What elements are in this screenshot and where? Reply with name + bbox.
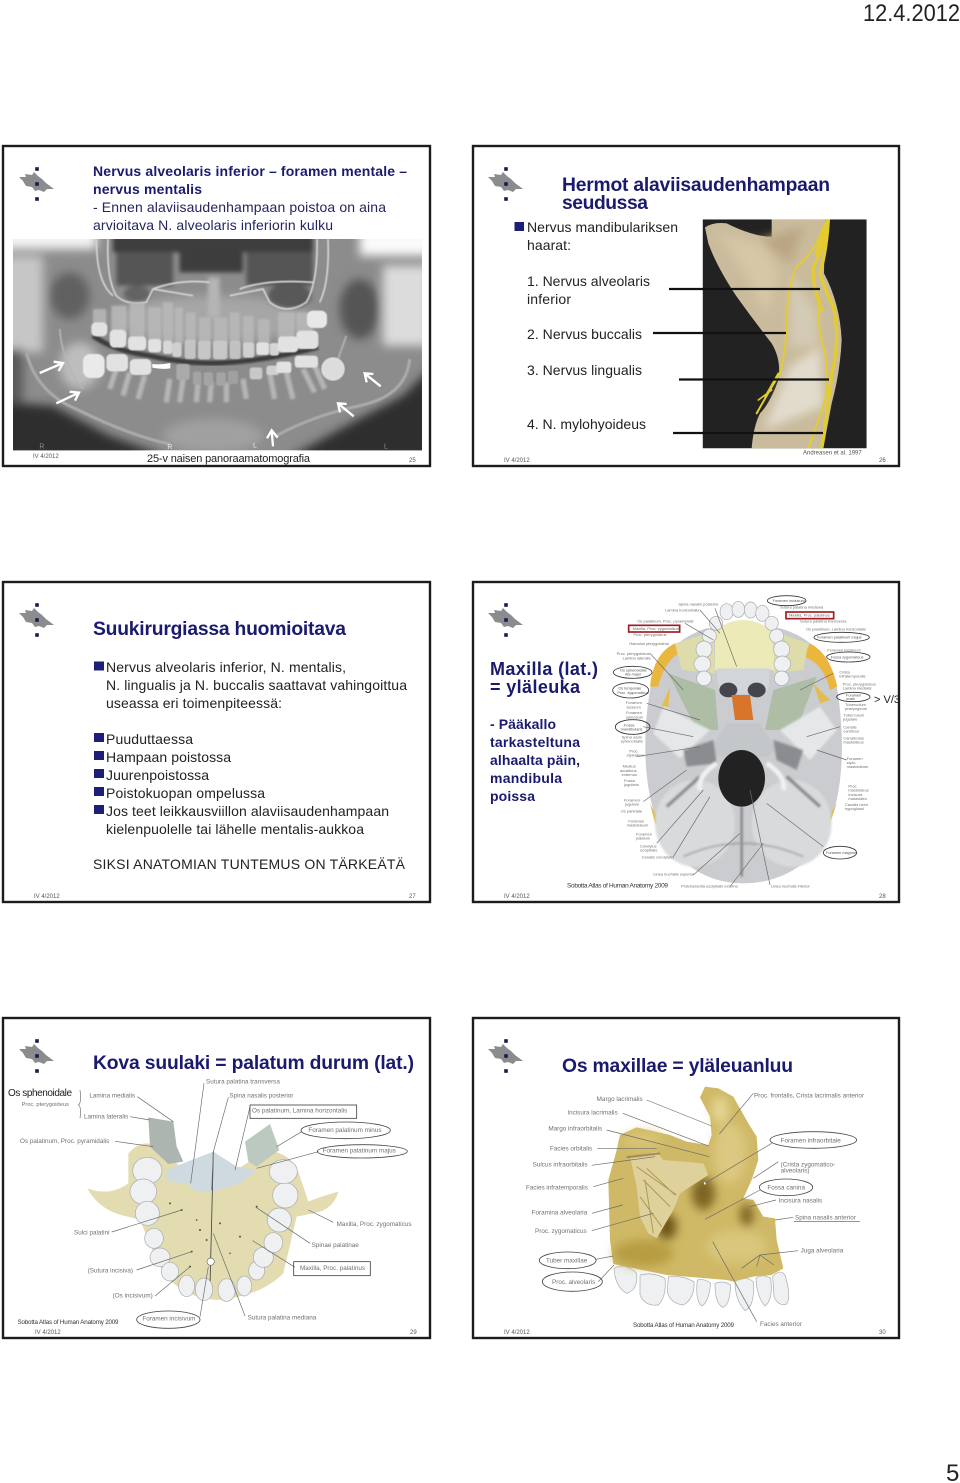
skull base illustration: Canalis nervi bbox=[845, 802, 868, 807]
skull base illustration: Foramen palatinum majus bbox=[817, 636, 862, 640]
panel: slide 30 maxilla: Sobotta Atlas of Human Anatomy 2009 bbox=[633, 1322, 735, 1329]
panel: slide 28 skull bbox=[473, 582, 900, 902]
skull base illustration: Os parietale bbox=[621, 809, 643, 814]
body text: N. lingualis ja N. buccalis saattavat vahingoittua bbox=[106, 677, 407, 693]
panel: slide 29 hard palate: IV 4/2012 bbox=[35, 1330, 61, 1336]
panel: slide 30 maxilla: IV 4/2012 bbox=[504, 1330, 530, 1336]
skull base illustration: Foramen bbox=[847, 756, 863, 761]
skull base illustration: palatum bbox=[636, 835, 651, 840]
panel: slide 30 maxilla bbox=[473, 1018, 899, 1338]
panel: slide 28 skull: Sobotta Atlas of Human Anatomy 2009 bbox=[567, 882, 668, 890]
body text: Jos teet leikkausviillon alaviisaudenhampaan bbox=[106, 803, 389, 819]
skull base illustration: mastoideum bbox=[627, 823, 649, 828]
maxilla illustration: Facies anterior bbox=[760, 1321, 802, 1328]
palate illustration: Lamina medialis bbox=[89, 1093, 135, 1100]
maxilla illustration: Proc. zygomaticus bbox=[535, 1228, 587, 1235]
panoramic x-ray image bbox=[13, 239, 422, 450]
pointer lines bbox=[653, 289, 829, 433]
body text: useassa eri toimenpiteessä: bbox=[106, 695, 282, 711]
skull base illustration: spinosum bbox=[626, 714, 644, 719]
palate illustration: (Sutura incisiva) bbox=[88, 1267, 133, 1274]
skull base illustration: sphenoidalis bbox=[621, 739, 643, 744]
panel: slide 27 surgery: IV 4/2012 bbox=[34, 894, 60, 900]
skull base illustration: lacerum bbox=[627, 704, 642, 709]
skull base illustration: Foramen bbox=[626, 700, 642, 705]
maxilla illustration: Spina nasalis anterior bbox=[795, 1214, 856, 1221]
nerve list: inferior bbox=[527, 291, 571, 307]
skull base illustration: externus bbox=[622, 772, 637, 777]
maxilla illustration: Facies orbitalis bbox=[550, 1145, 592, 1152]
slide 28 title bbox=[490, 659, 598, 697]
panel: slide 27 surgery bbox=[3, 582, 430, 902]
skull base illustration: ovale bbox=[846, 697, 855, 701]
palate illustration bbox=[20, 1079, 412, 1328]
skull base illustration: Spina nasalis posterior bbox=[678, 602, 719, 607]
slide 28 description: - Pääkallo bbox=[490, 716, 556, 732]
maxilla illustration: Foramen infraorbitale bbox=[781, 1137, 841, 1144]
maxilla illustration: Proc. frontalis, Crista lacrimalis anterior bbox=[754, 1093, 864, 1100]
skull base illustration: mastoideum bbox=[847, 764, 869, 769]
icon: university logo bbox=[19, 603, 54, 637]
body text: Poistokuopan ompelussa bbox=[106, 785, 265, 801]
skull base illustration: Foramen bbox=[846, 693, 861, 697]
skull base illustration: jugulare bbox=[842, 717, 858, 722]
body text: kielenpuolelle tai lähelle mentalis-aukkoa bbox=[106, 821, 364, 837]
skull base illustration: Canalis condylaris bbox=[642, 855, 674, 860]
palate illustration: Foramen incisivum bbox=[142, 1316, 195, 1323]
skull base illustration: Foramen incisivum bbox=[827, 647, 861, 652]
skull base illustration: mastoidea bbox=[848, 796, 867, 801]
icon: university logo bbox=[488, 603, 523, 637]
skull base illustration: Maxilla, Proc. zygomaticus bbox=[633, 626, 680, 631]
skull base illustration: Spina ossis bbox=[622, 734, 642, 739]
skull base illustration: Incisura bbox=[848, 792, 863, 797]
panel: slide 26 nerves bbox=[473, 146, 899, 466]
skull base illustration: Sutura palatina transversa bbox=[800, 619, 847, 624]
slide 25 heading text: - Ennen alaviisaudenhampaan poistoa on aina bbox=[93, 199, 386, 215]
skull base illustration: Proc. bbox=[629, 749, 639, 754]
panel: slide 29 hard palate bbox=[3, 1018, 430, 1338]
icon: university logo bbox=[488, 167, 523, 201]
panoramic x-ray image: L bbox=[384, 443, 388, 450]
skull base illustration: styloideus bbox=[627, 753, 644, 758]
skull base illustration: Lamina lateralis bbox=[623, 655, 651, 660]
skull base illustration: Foramen magnum bbox=[826, 851, 857, 855]
skull base illustration: Os palatinum, Lamina horizontalis bbox=[806, 627, 866, 632]
slide 26 title: Hermot alaviisaudenhampaan bbox=[562, 175, 830, 196]
skull base illustration: Foramen bbox=[626, 710, 642, 715]
skull base illustration: Meatus bbox=[623, 764, 636, 769]
maxilla illustration: alveolaris) bbox=[781, 1168, 810, 1175]
skull base illustration: Crista bbox=[839, 669, 851, 674]
slide 25 heading text: arvioitava N. alveolaris inferiorin kulku bbox=[93, 217, 333, 233]
arrows bbox=[40, 362, 381, 446]
skull base illustration: Linea nuchalis inferior bbox=[771, 883, 810, 888]
skull base illustration: Linea nuchalis superior bbox=[653, 872, 695, 877]
palate illustration: (Os incisivum) bbox=[113, 1293, 153, 1300]
skull base illustration: Fossa zygomaticus bbox=[831, 655, 864, 659]
label: Os sphenoidale: Os sphenoidale bbox=[8, 1088, 72, 1099]
skull base illustration: Canaliculus bbox=[843, 735, 864, 740]
panel: slide 25 panoramic x-ray: IV 4/2012 bbox=[33, 454, 59, 460]
panoramic x-ray image: L bbox=[253, 443, 257, 450]
icon: university logo bbox=[19, 167, 54, 201]
slide 28 title: Maxilla (lat.) bbox=[490, 659, 598, 679]
maxilla illustration: Facies infratemporalis bbox=[526, 1184, 588, 1191]
panoramic x-ray image: R bbox=[39, 443, 44, 450]
maxilla illustration: (Crista zygomatico- bbox=[781, 1161, 835, 1168]
skull base illustration: Ala major bbox=[625, 673, 642, 677]
skull base illustration: Tuberculum bbox=[843, 713, 865, 718]
body text: Puuduttaessa bbox=[106, 731, 193, 747]
skull base illustration: Os temporale bbox=[618, 686, 641, 690]
panel: slide 25 panoramic x-ray: 25 bbox=[409, 458, 416, 464]
skull base illustration: Foramen incisivum bbox=[773, 599, 805, 603]
skull base illustration: infratemporalis bbox=[839, 673, 865, 678]
palate illustration: Spinae palatinae bbox=[312, 1242, 359, 1249]
skull base illustration: Os sphenoidale bbox=[620, 669, 647, 673]
palate illustration: Foramen palatinum majus bbox=[323, 1148, 396, 1155]
maxilla illustration: Incisura nasalis bbox=[779, 1197, 822, 1204]
skull base illustration: Proc. pterygoideus bbox=[617, 651, 650, 656]
slide 29 title: Kova suulaki = palatum durum (lat.) bbox=[93, 1053, 414, 1074]
skull base illustration: Foramen bbox=[628, 819, 644, 824]
maxilla illustration: Margo infraorbitalis bbox=[548, 1126, 602, 1133]
palate illustration: Foramen palatinum minus bbox=[308, 1127, 382, 1134]
palate illustration: Os palatinum, Proc. pyramidalis bbox=[20, 1138, 109, 1145]
skull base illustration: caroticus bbox=[843, 729, 859, 734]
skull base illustration: mandibularis bbox=[621, 727, 642, 731]
nerve list: haarat: bbox=[527, 237, 571, 253]
slide 28 description bbox=[490, 716, 580, 804]
skull base illustration: Proc. bbox=[848, 783, 858, 788]
skull base illustration: Os palatinum, Proc. pyramidalis bbox=[637, 618, 694, 623]
palate illustration: Sulci palatini bbox=[74, 1229, 110, 1236]
skull base illustration: occipitalis bbox=[640, 847, 657, 852]
icon: university logo bbox=[19, 1039, 54, 1073]
palate illustration: Sutura palatina mediana bbox=[248, 1314, 317, 1321]
skull base illustration: mastoideus bbox=[843, 739, 864, 744]
panel: slide 25 panoramic x-ray bbox=[3, 146, 433, 466]
skull base illustration: Maxilla, Proc. palatinus bbox=[789, 613, 830, 618]
skull base illustration: stylo- bbox=[847, 760, 857, 765]
palate illustration: Sutura palatina transversa bbox=[206, 1079, 280, 1086]
body text: Nervus alveolaris inferior, N. mentalis, bbox=[106, 659, 346, 675]
skull base illustration: Foramen bbox=[624, 798, 640, 803]
slide 28 description: mandibula bbox=[490, 770, 562, 786]
skull base illustration: Lamina medialis bbox=[843, 685, 871, 690]
body text: Juurenpoistossa bbox=[106, 767, 209, 783]
body text: Hampaan poistossa bbox=[106, 749, 231, 765]
skull base illustration: Proc. pterygoideus bbox=[843, 681, 876, 686]
slide 28 description: poissa bbox=[490, 788, 535, 804]
panoramic x-ray image: R bbox=[167, 444, 172, 451]
skull base illustration: Fossa bbox=[624, 723, 635, 727]
maxilla illustration: Tuber maxillae bbox=[546, 1258, 588, 1265]
nerve list: 2. Nervus buccalis bbox=[527, 326, 642, 342]
skull base illustration: Lamina horizontalis bbox=[665, 608, 699, 613]
maxilla illustration bbox=[526, 1087, 864, 1328]
panel: slide 26 nerves: 26 bbox=[879, 458, 886, 464]
skull base illustration: Protuberantia occipitalis externa bbox=[681, 883, 738, 888]
maxilla illustration: Foramina alveolaria bbox=[532, 1209, 588, 1216]
skull base illustration bbox=[613, 596, 876, 888]
palate illustration: Maxilla, Proc. palatinus bbox=[300, 1265, 365, 1272]
palate illustration: Spina nasalis posterior bbox=[229, 1093, 293, 1100]
body text bbox=[93, 659, 407, 872]
slide 28 description: tarkasteltuna bbox=[490, 734, 580, 750]
panel: slide 28 skull: IV 4/2012 bbox=[504, 894, 530, 900]
panel: slide 26 nerves: IV 4/2012 bbox=[504, 458, 530, 464]
skull base illustration: Canalis bbox=[843, 725, 857, 730]
skull base illustration: pharyngeum bbox=[845, 706, 868, 711]
skull base illustration: Tuberculum bbox=[845, 702, 867, 707]
nerve anatomy image bbox=[703, 219, 867, 448]
body text: SIKSI ANATOMIAN TUNTEMUS ON TÄRKEÄTÄ bbox=[93, 856, 406, 872]
slide 25 heading text: nervus mentalis bbox=[93, 181, 202, 197]
maxilla illustration: Proc. alveolaris bbox=[552, 1279, 595, 1286]
panel: slide 29 hard palate: 29 bbox=[410, 1330, 417, 1336]
skull base illustration: hypoglossi bbox=[845, 806, 864, 811]
skull base illustration: acusticus bbox=[620, 768, 637, 773]
skull base illustration: Proc. zygomaticus bbox=[617, 691, 649, 695]
slide 30 title: Os maxillae = yläleuanluu bbox=[562, 1056, 793, 1077]
panel: slide 29 hard palate: Sobotta Atlas of Human Anatomy 2009 bbox=[18, 1319, 119, 1326]
skull base illustration: mastoideus bbox=[848, 787, 869, 792]
slide 25 heading text bbox=[93, 163, 407, 233]
nerve list bbox=[514, 219, 678, 432]
panel: slide 27 surgery: 27 bbox=[409, 894, 416, 900]
palate illustration: Proc. pterygoideus bbox=[22, 1102, 69, 1108]
panel: slide 30 maxilla: 30 bbox=[879, 1330, 886, 1336]
palate illustration: Lamina lateralis bbox=[84, 1113, 128, 1120]
skull base illustration: Fossa bbox=[624, 778, 636, 783]
maxilla illustration: Sulcus infraorbitalis bbox=[533, 1162, 588, 1169]
skull base illustration: Proc. pterygoideus bbox=[633, 632, 667, 637]
slide 26 title bbox=[562, 175, 830, 214]
slide 26 title: seudussa bbox=[562, 193, 648, 214]
maxilla illustration: Incisura lacrimalis bbox=[567, 1109, 618, 1116]
slide 27 title: Suukirurgiassa huomioitava bbox=[93, 619, 346, 640]
slide 28 description: alhaalta päin, bbox=[490, 752, 580, 768]
skull base illustration: jugularis bbox=[623, 782, 639, 787]
maxilla illustration: Margo lacrimalis bbox=[597, 1096, 643, 1103]
nerve list: 3. Nervus lingualis bbox=[527, 362, 642, 378]
skull base illustration: Hamulus pterygoideus bbox=[629, 641, 669, 646]
slide 28 title: = yläleuka bbox=[490, 677, 581, 697]
nerve list: 4. N. mylohyoideus bbox=[527, 416, 646, 432]
maxilla illustration: Fossa canina bbox=[767, 1184, 805, 1191]
maxilla illustration: Juga alveolaria bbox=[801, 1248, 844, 1255]
palate illustration: Maxilla, Proc. zygomaticus bbox=[337, 1221, 412, 1228]
caption: 25-v naisen panoraamatomografia bbox=[147, 453, 311, 465]
slide 25 heading text: Nervus alveolaris inferior – foramen mentale – bbox=[93, 163, 407, 179]
icon: university logo bbox=[488, 1039, 523, 1073]
nerve list: Nervus mandibulariksen bbox=[527, 219, 678, 235]
skull base illustration: Sutura palatina mediana bbox=[780, 604, 824, 609]
nerve list: 1. Nervus alveolaris bbox=[527, 273, 650, 289]
panel: slide 28 skull: 28 bbox=[879, 894, 886, 900]
skull base illustration: Foramen bbox=[636, 831, 652, 836]
palate illustration: Os palatinum, Lamina horizontalis bbox=[252, 1107, 347, 1114]
panel: slide 28 skull: > V/3 bbox=[874, 694, 900, 706]
skull base illustration: Condylus bbox=[640, 843, 657, 848]
panel: slide 26 nerves: Andreasen et al. 1997 bbox=[803, 450, 862, 456]
skull base illustration: jugulare bbox=[624, 802, 640, 807]
